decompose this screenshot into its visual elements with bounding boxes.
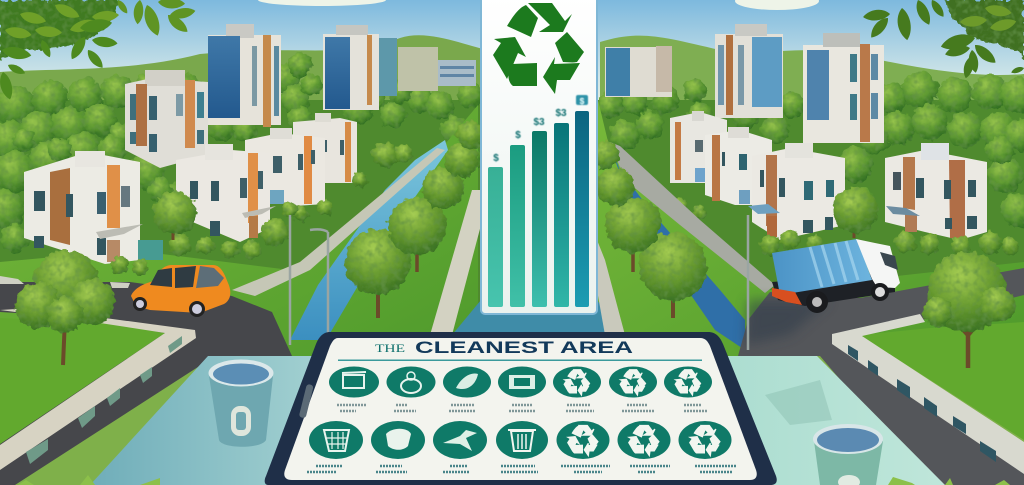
clouds (258, 0, 819, 10)
sidewalk: left (232, 148, 445, 296)
tree: front left (15, 250, 115, 365)
curb: front left (0, 309, 196, 470)
icon: recycle (609, 366, 657, 398)
lawn: front left (0, 318, 165, 444)
river: left (290, 140, 448, 340)
trash bin: left (208, 360, 274, 447)
building: tall glass A (208, 24, 281, 127)
icon: container (329, 366, 379, 398)
tree: river right mid (605, 197, 661, 272)
center panel: chart (481, 0, 597, 314)
icon: recycle (618, 421, 670, 459)
house: front left (24, 151, 143, 264)
icon: hand (371, 421, 425, 459)
sidewalk: center left (430, 190, 481, 335)
lamp posts (290, 215, 748, 350)
house: right back 1 (670, 111, 727, 183)
title rule (338, 360, 702, 361)
curb strip upper left (0, 276, 24, 284)
bar value labels (493, 95, 588, 164)
bar value labels: $3 (555, 108, 567, 119)
green utility box (138, 240, 163, 260)
building: tall C (715, 24, 783, 118)
tablet screen (284, 338, 757, 480)
tree: river left mid (388, 197, 446, 272)
leaves: bottom (18, 475, 1010, 485)
illegible captions row one (337, 405, 708, 411)
lawn: left side (0, 105, 478, 356)
illegible captions row two (307, 466, 736, 472)
trash bin: right (813, 424, 883, 485)
building: distant row (379, 38, 476, 96)
tree: river right near (639, 233, 707, 318)
icon: scatter (433, 421, 487, 459)
house: right front 3 (748, 143, 845, 240)
tall buildings: left (208, 24, 476, 127)
icon: box (498, 366, 546, 398)
lawn: front right (860, 322, 1024, 440)
sidewalk: right (610, 142, 775, 293)
bar value labels: $3 (533, 117, 545, 128)
house: right back 2 (705, 127, 772, 205)
bar value labels: $ (515, 130, 521, 141)
bar value labels: $ (580, 97, 585, 106)
tree: river right far (591, 141, 634, 206)
glass table: left (90, 356, 350, 485)
icon: recycle (553, 366, 601, 398)
icon row one (329, 366, 712, 398)
house: row front 2 (176, 144, 276, 242)
building: distant right (605, 46, 672, 97)
tall buildings: right (605, 24, 884, 143)
icon row two (309, 421, 732, 459)
building: tall D (803, 33, 884, 143)
icon: wire bin (309, 421, 363, 459)
apartment: back left (125, 70, 208, 168)
bar chart (488, 111, 589, 307)
river: center (452, 300, 622, 335)
side button (299, 384, 314, 418)
tree: front right (923, 252, 1016, 368)
ground base (0, 100, 1024, 340)
title (375, 338, 633, 357)
garbage truck (772, 239, 900, 313)
tablet frame (265, 332, 777, 485)
tree: river left near (345, 229, 411, 318)
sky background (0, 0, 1024, 110)
foliage: top left (0, 0, 196, 101)
glass table: right (690, 356, 945, 485)
icon: recycle (664, 366, 712, 398)
tablet (265, 332, 777, 485)
icon: recycling logo (493, 3, 584, 94)
icon: bin (496, 421, 548, 459)
car (131, 265, 230, 317)
bar value labels: $ (493, 153, 499, 164)
shrubs (111, 142, 1019, 276)
house: row back 3 (245, 128, 325, 206)
tree: river left far (422, 121, 484, 209)
icon: bag (386, 366, 436, 398)
forest: left (0, 53, 483, 252)
table reflection (765, 380, 832, 425)
road (0, 268, 1024, 485)
house: row back 4 (293, 113, 357, 183)
icon: recycle (678, 421, 732, 459)
forest: right (588, 72, 1024, 227)
curb: front right (832, 314, 1024, 474)
icon: leaf (443, 366, 491, 398)
icon: recycle (556, 421, 610, 459)
foliage: top right (863, 0, 1024, 79)
tree: garden left (153, 191, 197, 240)
house: right front 4 (885, 143, 987, 240)
panel background (481, 0, 597, 314)
title: CLEANEST AREA (415, 338, 633, 357)
lawn: right side (598, 100, 1024, 356)
tree: garden right (832, 187, 878, 238)
title: THE (375, 341, 405, 355)
distant hills (0, 35, 1024, 140)
river: right (612, 150, 745, 350)
sidewalk: center right (597, 240, 625, 335)
building: tall glass B (323, 25, 379, 110)
